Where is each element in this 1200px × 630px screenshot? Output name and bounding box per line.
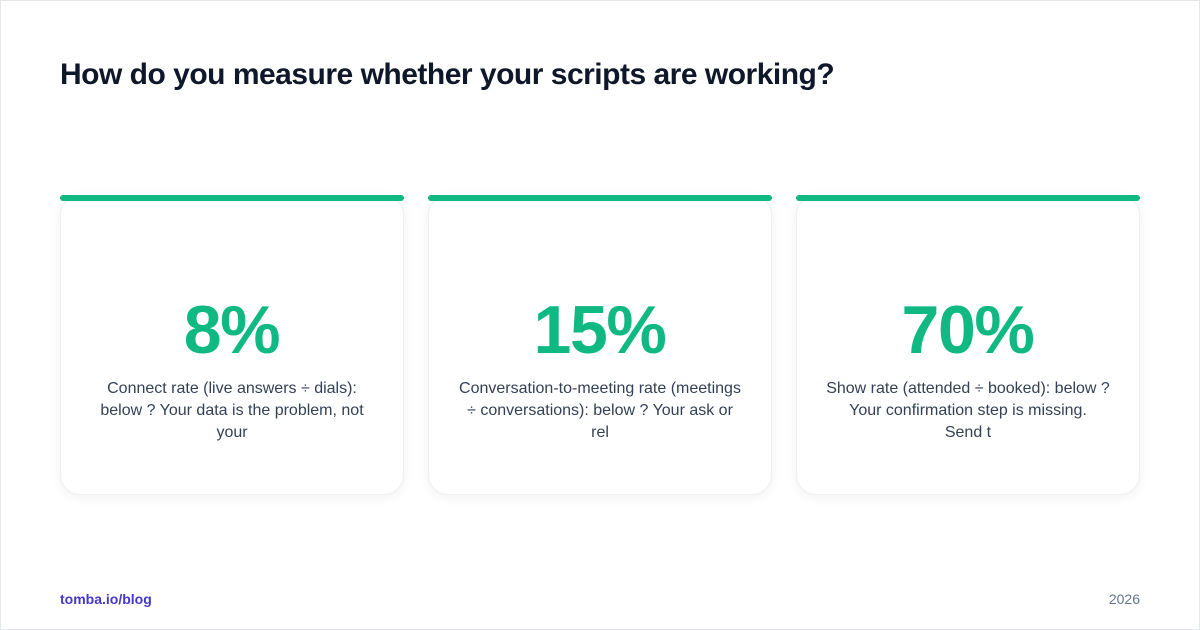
description: conversation-to-meeting rate: [459, 380, 741, 441]
description: show rate: Send t: [945, 424, 991, 441]
description: conversation-to-meeting rate: rel: [591, 424, 609, 441]
footer brand: tomba.io/blog: [60, 591, 152, 607]
description: connect rate: below ? Your data is the problem, not: [100, 402, 364, 419]
description: conversation-to-meeting rate: Conversation-to-meeting rate (meetings: [459, 380, 741, 397]
card background: [796, 195, 1140, 495]
stat: 70%: 70%: [901, 292, 1034, 368]
description: show rate: [826, 380, 1110, 441]
stat: 15%: 15%: [533, 292, 666, 368]
description: connect rate: [100, 380, 364, 441]
panel: connect rate: [60, 195, 404, 496]
description: connect rate: your: [216, 424, 248, 441]
panel: show rate: [796, 195, 1140, 496]
title: How do you measure whether your scripts are working?: [60, 58, 834, 91]
description: connect rate: Connect rate (live answers ÷ dials):: [107, 380, 357, 397]
green top bar: [796, 195, 1140, 201]
card background: [428, 195, 772, 495]
panel: conversation-to-meeting rate: [428, 195, 772, 496]
green top bar: [60, 195, 404, 201]
description: conversation-to-meeting rate: ÷ conversations): below ? Your ask or: [467, 402, 733, 419]
description: show rate: Your confirmation step is missing.: [849, 402, 1087, 419]
green top bar: [428, 195, 772, 201]
description: show rate: Show rate (attended ÷ booked): below ?: [826, 380, 1110, 397]
stat: 8%: 8%: [184, 292, 279, 368]
card background: [60, 195, 404, 495]
footer year: 2026: [1109, 591, 1140, 607]
